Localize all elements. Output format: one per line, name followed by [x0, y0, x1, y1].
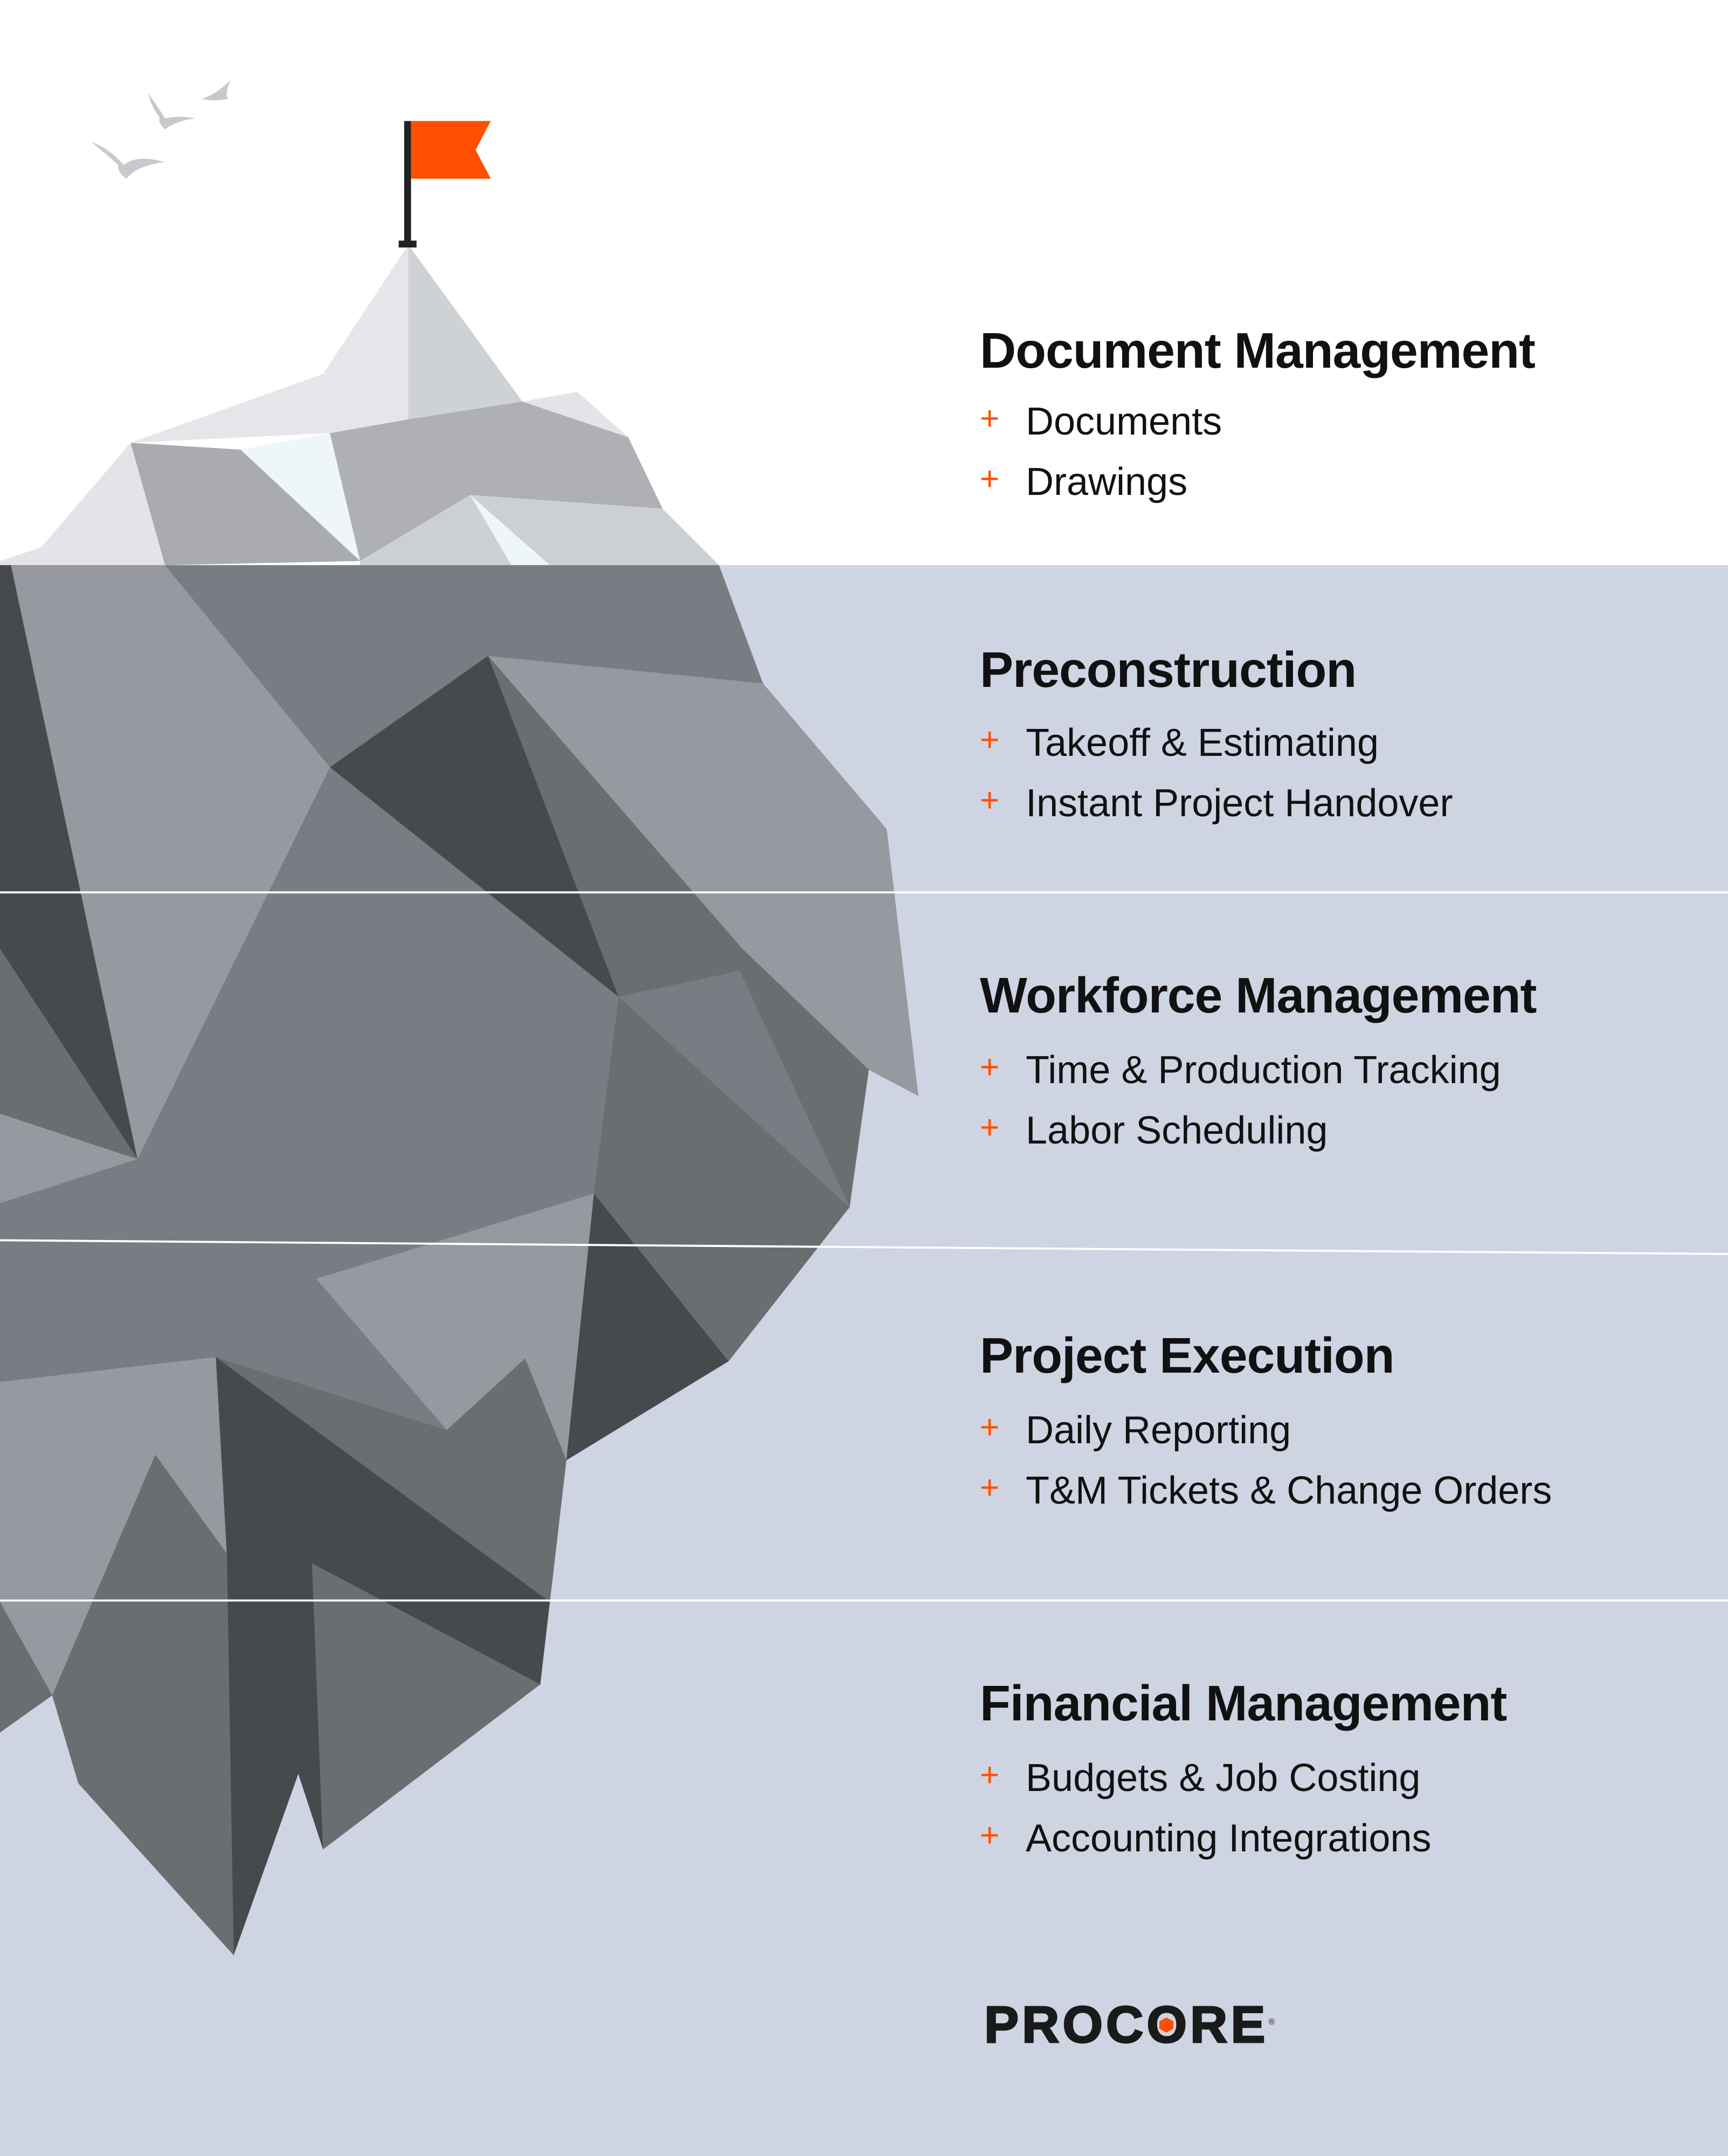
section: Preconstruction — [980, 642, 1453, 825]
item: Time tracking — [980, 1049, 1501, 1092]
section: Document Management: + — [980, 400, 999, 437]
logo: Procore: O — [1146, 1996, 1190, 2054]
section: Workforce Management: Time & Production Tracking — [1026, 1049, 1501, 1092]
section: Preconstruction: Takeoff & Estimating — [1026, 721, 1379, 764]
section: Project Execution: Project Execution — [980, 1327, 1394, 1383]
section: Preconstruction: Preconstruction — [980, 642, 1356, 698]
item: Accounting — [980, 1817, 1431, 1860]
section: Workforce Management — [980, 967, 1537, 1152]
section: Financial Management: + — [980, 1817, 999, 1854]
section: Preconstruction: Instant Project Handover — [1026, 782, 1453, 825]
item: Budgets — [980, 1757, 1420, 1800]
icon: flag — [399, 121, 491, 247]
section: Document Management: Drawings — [1026, 460, 1187, 504]
section: Document Management — [980, 322, 1535, 504]
section: Project Execution: Daily Reporting — [1026, 1409, 1291, 1452]
logo: Procore: PROC RE® — [984, 1996, 1278, 2054]
section: Preconstruction: + — [980, 782, 999, 819]
section: Project Execution: + — [980, 1409, 999, 1446]
iceberg underwater — [0, 565, 918, 1955]
section: Workforce Management: + — [980, 1049, 999, 1086]
section: Financial Management: Budgets & Job Costing — [1026, 1757, 1420, 1800]
section: Workforce Management: + — [980, 1109, 999, 1146]
section: Document Management: + — [980, 460, 999, 498]
section: Project Execution: + — [980, 1469, 999, 1506]
iceberg tip — [0, 245, 719, 565]
item: Daily Reporting — [980, 1409, 1291, 1452]
item: Handover — [980, 782, 1453, 825]
item: Takeoff — [980, 721, 1379, 764]
section: Preconstruction: + — [980, 721, 999, 759]
section: Workforce Management: Workforce Management — [980, 967, 1537, 1023]
item: T&M — [980, 1469, 1552, 1512]
section: Project Execution — [980, 1327, 1552, 1512]
section: Document Management: Documents — [1026, 400, 1222, 443]
section: Document Management: Document Management — [980, 322, 1535, 378]
icon: birds — [91, 80, 231, 179]
item: Drawings — [980, 460, 1187, 504]
section: Financial Management: + — [980, 1757, 999, 1794]
section: Financial Management: Financial Management — [980, 1675, 1506, 1731]
section: Project Execution: T&M Tickets & Change Orders — [1026, 1469, 1552, 1512]
item: Documents — [980, 400, 1222, 443]
section: Workforce Management: Labor Scheduling — [1026, 1109, 1328, 1152]
section: Financial Management — [980, 1675, 1507, 1860]
section: Financial Management: Accounting Integrations — [1026, 1817, 1431, 1860]
item: Labor Scheduling — [980, 1109, 1328, 1152]
